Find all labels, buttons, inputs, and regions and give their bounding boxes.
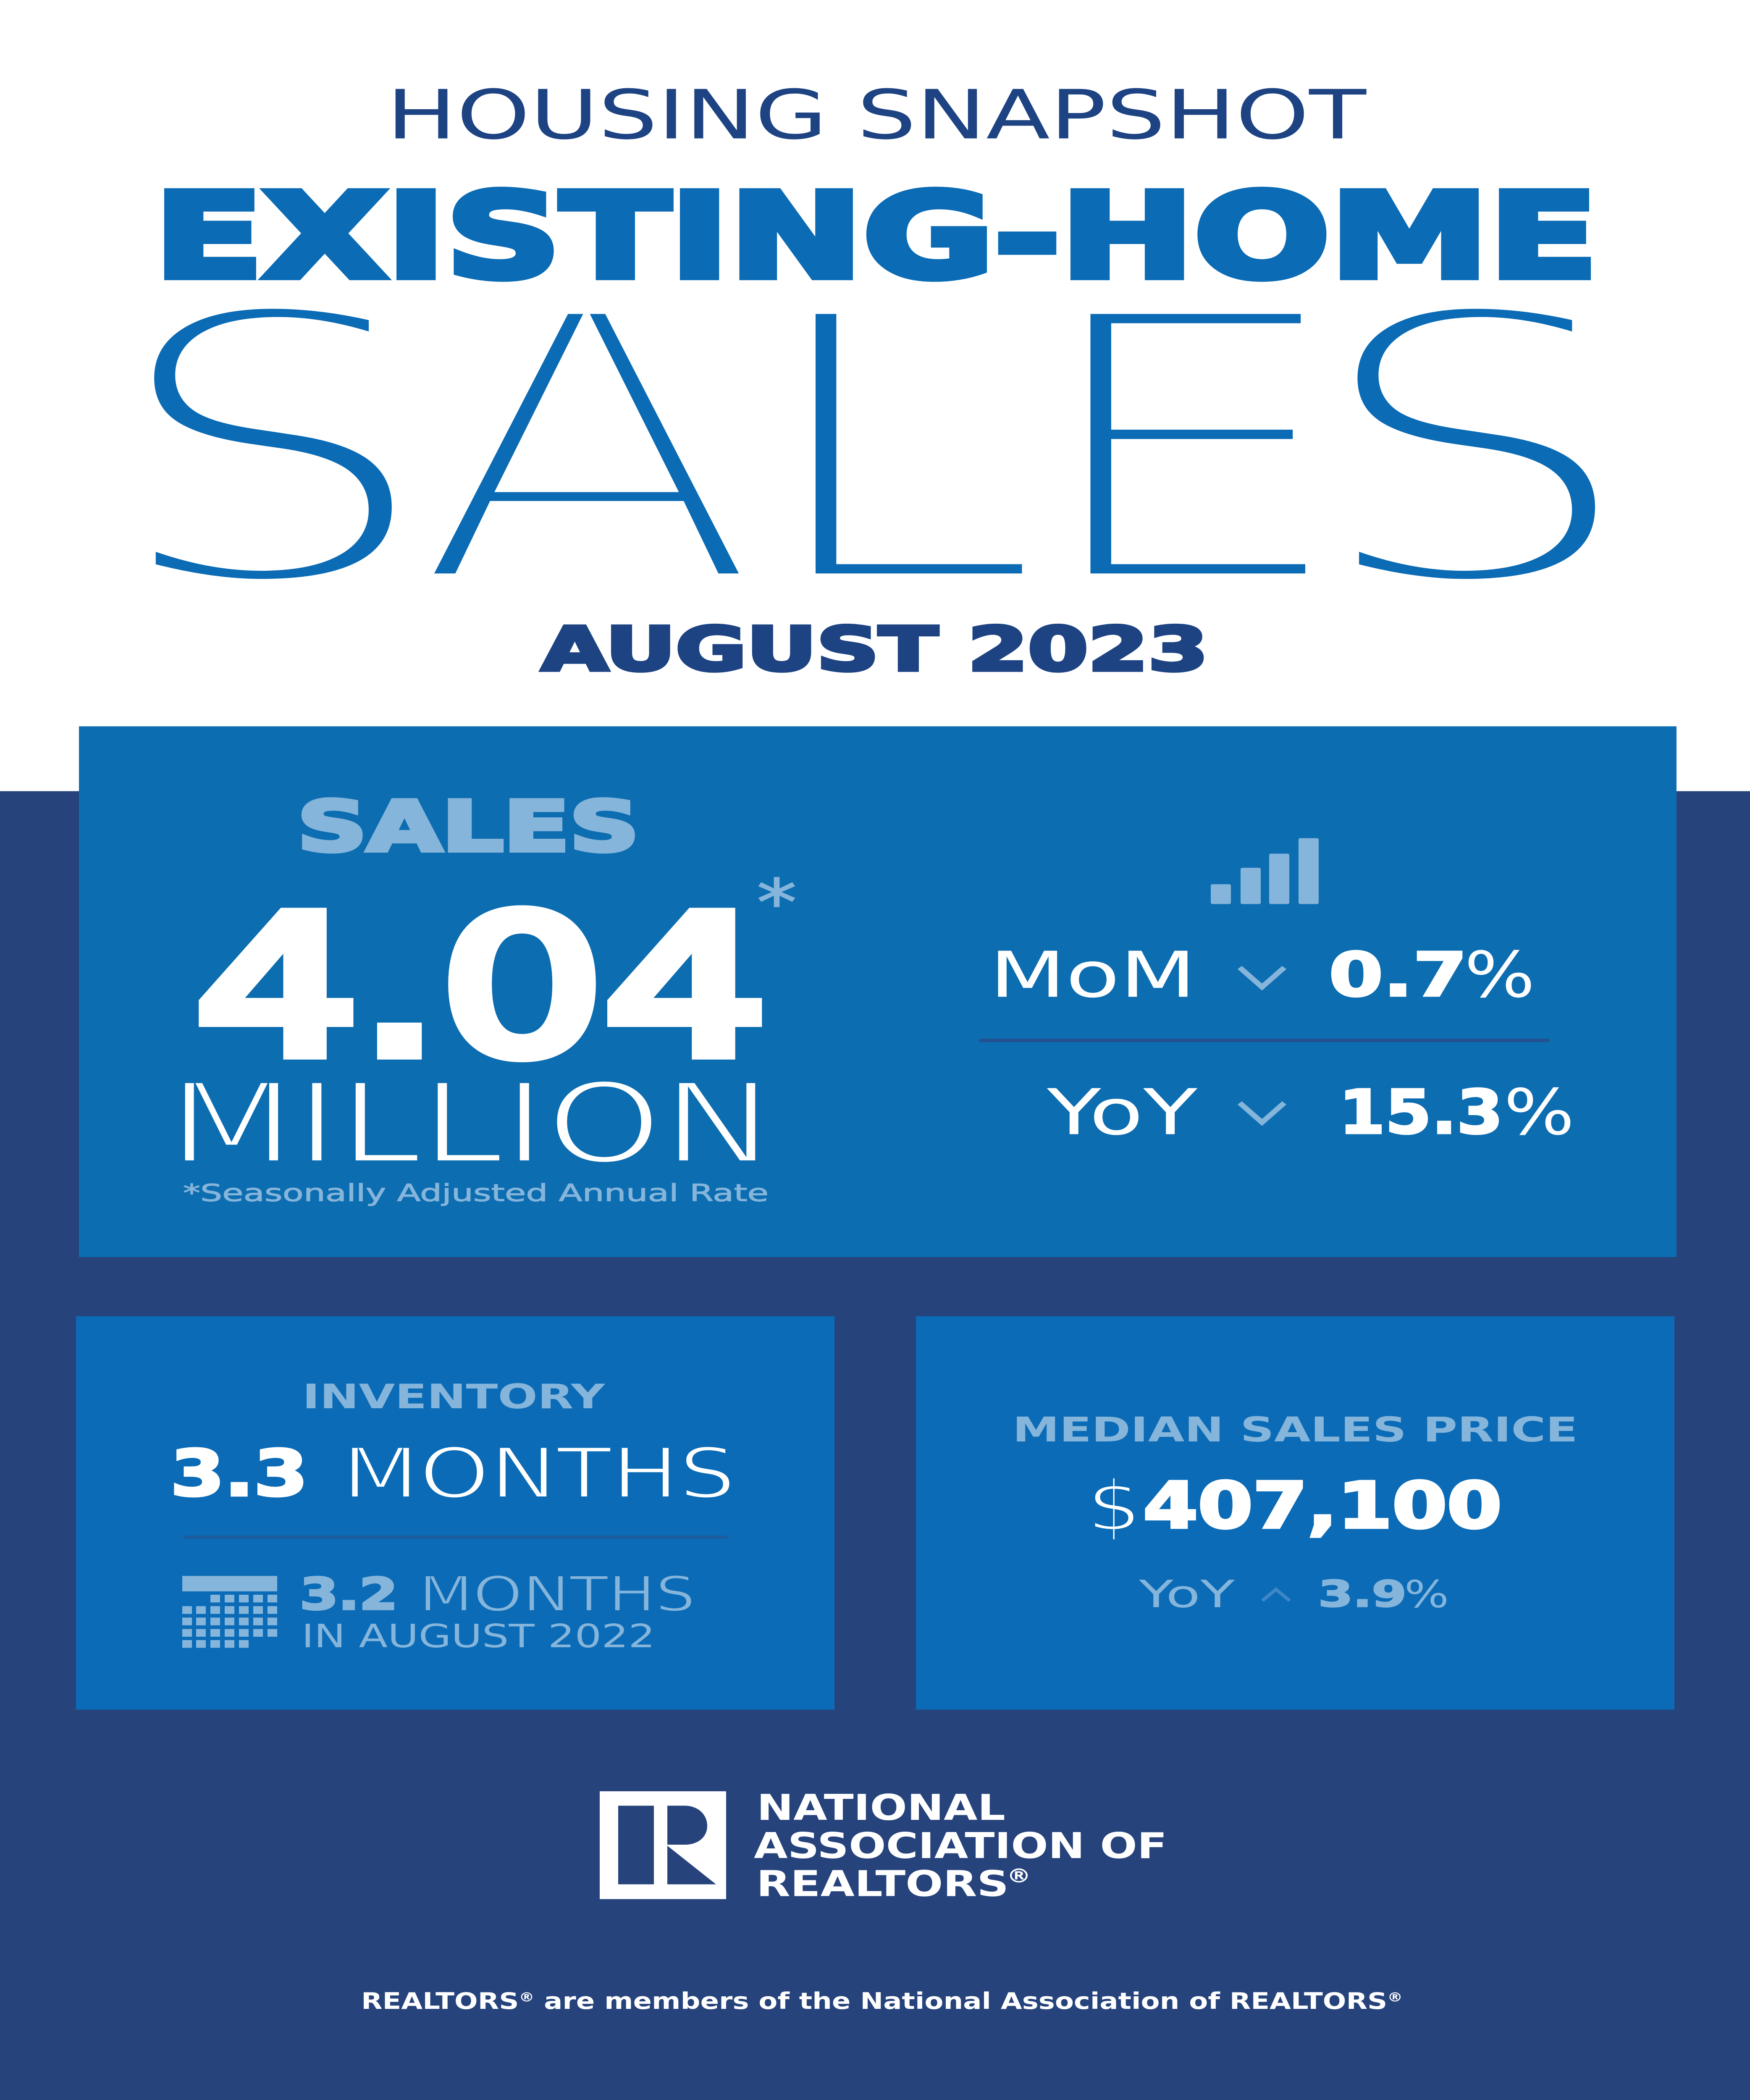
logo mark	[600, 1791, 726, 1899]
unit: million: MILLION	[168, 1059, 772, 1189]
icon: calendar	[182, 1576, 277, 1648]
stat: year over year: 15.3	[1339, 1077, 1503, 1147]
heading: date: AUGUST 2023	[541, 614, 1208, 685]
logo wordmark: ®	[1007, 1865, 1031, 1887]
logo wordmark: ASSOCIATION OF	[754, 1825, 1167, 1866]
stat: price year over year: %	[1404, 1572, 1449, 1616]
stat: current inventory: 3.3	[171, 1437, 308, 1510]
logo wordmark: NATIONAL	[757, 1787, 1005, 1828]
stat: year over year: YoY	[1047, 1076, 1198, 1150]
panel: median sales price	[916, 1316, 1674, 1710]
big number: price: $	[1086, 1466, 1142, 1547]
big number: 4.04: 4.04	[195, 877, 767, 1098]
logo wordmark: REALTORS	[756, 1863, 1009, 1905]
big number: price: 407,100	[1143, 1469, 1502, 1543]
asterisk: *	[757, 866, 797, 940]
stat: prior-year inventory	[300, 1566, 695, 1655]
stat: month over month: %	[1464, 939, 1535, 1012]
stat: price year over year: YoY	[1139, 1572, 1235, 1616]
stat: current inventory	[171, 1433, 736, 1515]
stat: year over year	[1047, 1076, 1574, 1150]
panel heading: sales: SALES	[297, 786, 639, 867]
panel heading: median sales price: MEDIAN SALES PRICE	[1013, 1410, 1578, 1450]
footer disclaimer: REALTORS	[361, 1988, 525, 2014]
panel: sales	[79, 726, 1677, 1257]
heading: existing-home: EXISTING-HOME	[154, 169, 1598, 304]
stat: price year over year	[1139, 1572, 1449, 1616]
stat: prior-year inventory: MONTHS	[419, 1566, 695, 1622]
icon: bar signal	[1211, 838, 1319, 904]
stat: year over year: %	[1504, 1076, 1574, 1150]
stat: month over month	[989, 939, 1535, 1012]
logo: national association of realtors	[600, 1787, 1167, 1905]
stat: month over month: 0.7	[1329, 940, 1467, 1010]
stat: month over month: MoM	[989, 939, 1196, 1012]
footer disclaimer: are members of the National Association of REALTORS	[534, 1988, 1387, 2014]
stat: prior-year inventory: IN AUGUST 2022	[302, 1617, 655, 1655]
footer disclaimer: ®	[519, 1990, 534, 2005]
stat: price year over year: 3.9	[1318, 1573, 1406, 1615]
panel: inventory	[76, 1316, 834, 1710]
header: title block	[104, 76, 1640, 685]
logo wordmark	[754, 1787, 1167, 1905]
heading: sales: SALES	[104, 226, 1640, 677]
panel heading: inventory: INVENTORY	[302, 1378, 606, 1416]
footer disclaimer: ®	[1387, 1990, 1403, 2005]
stat: current inventory: MONTHS	[342, 1433, 736, 1515]
stat: prior-year inventory: 3.2	[300, 1569, 398, 1620]
footnote: *Seasonally Adjusted Annual Rate	[183, 1179, 769, 1207]
heading: housing snapshot: HOUSING SNAPSHOT	[386, 76, 1367, 155]
